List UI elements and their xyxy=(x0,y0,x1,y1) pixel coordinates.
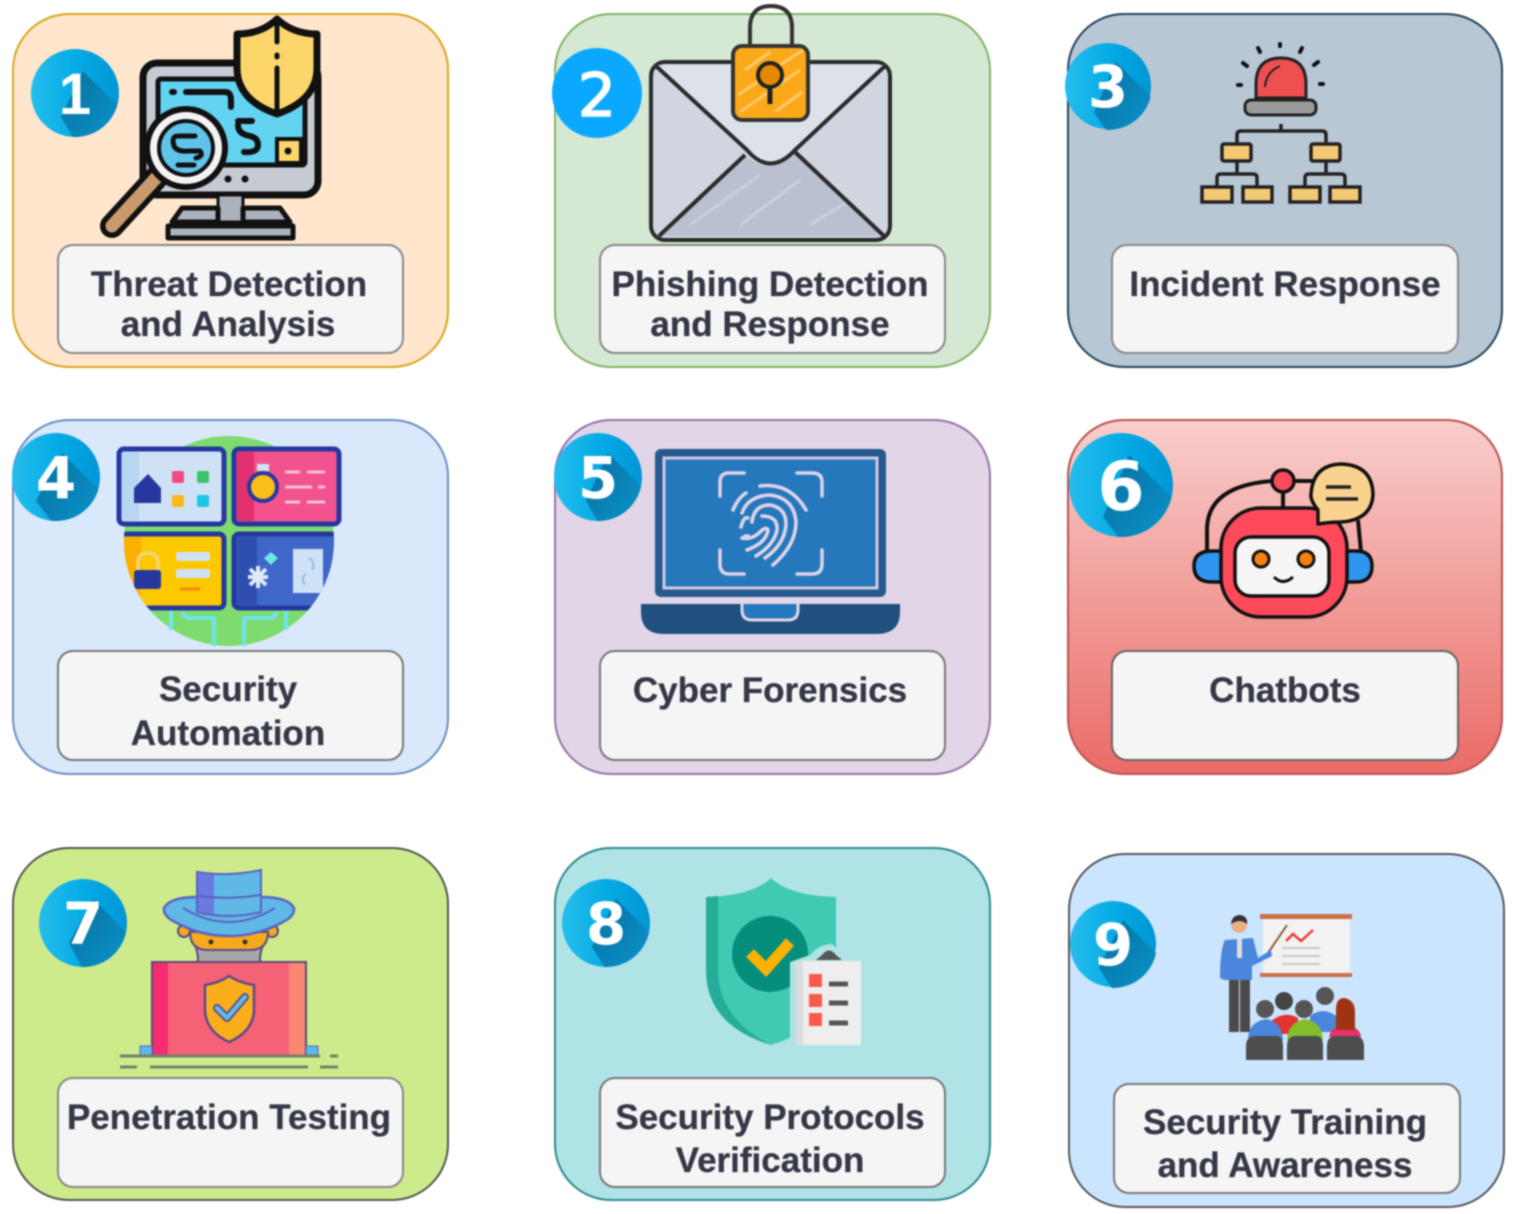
badge: number 5: 5 xyxy=(578,444,618,512)
label box xyxy=(58,1078,403,1187)
panel: penetration testing xyxy=(13,848,448,1200)
panel: phishing detection and response xyxy=(552,6,990,367)
panel: chatbots xyxy=(1068,420,1502,774)
icon: envelope with padlock xyxy=(651,6,890,240)
icon: shield with checklist xyxy=(706,878,861,1050)
label text: and Analysis xyxy=(121,305,335,344)
label text: Cyber Forensics xyxy=(633,671,907,710)
label text: Penetration Testing xyxy=(67,1098,391,1137)
badge: number 8: 8 xyxy=(586,890,626,958)
badge: number 4: 4 xyxy=(36,444,76,512)
badge: number 9: 9 xyxy=(1093,911,1133,979)
label box xyxy=(600,651,945,760)
card background xyxy=(1069,854,1504,1207)
label text: Security Training xyxy=(1143,1103,1427,1142)
card background xyxy=(555,848,990,1200)
icon: alarm and hierarchy xyxy=(1202,44,1360,202)
card background xyxy=(1068,420,1502,774)
badge: number 7 xyxy=(38,878,128,968)
label box xyxy=(600,1078,945,1187)
card background xyxy=(555,420,990,774)
panel: security training and awareness xyxy=(1069,854,1504,1207)
label box xyxy=(58,245,403,353)
label box xyxy=(1114,1084,1460,1193)
icon: hacker behind laptop xyxy=(120,870,338,1067)
badge: number 2 xyxy=(552,48,642,138)
label text: Security xyxy=(159,670,298,709)
card background xyxy=(1068,14,1502,367)
card background xyxy=(555,14,990,367)
panel: security automation xyxy=(12,420,448,774)
badge: number 2: 2 xyxy=(578,61,616,131)
badge: number 4 xyxy=(11,432,101,522)
badge: number 3 xyxy=(1064,42,1152,131)
icon: monitor with shield and magnifier xyxy=(112,19,318,238)
icon: presenter and audience xyxy=(1220,914,1364,1060)
badge: number 1 xyxy=(30,48,120,138)
label text: Security Protocols xyxy=(615,1098,925,1137)
label text: and Awareness xyxy=(1158,1146,1412,1185)
label text: and Response xyxy=(650,305,890,344)
label box xyxy=(1112,651,1458,760)
icon: robot with speech bubble xyxy=(1194,464,1373,617)
panel: incident response xyxy=(1065,14,1502,367)
label text: Threat Detection xyxy=(91,265,367,304)
badge: number 6 xyxy=(1068,432,1174,538)
badge: number 7: 7 xyxy=(63,890,103,958)
icon: shield dashboard xyxy=(119,436,339,646)
badge: number 8 xyxy=(561,878,651,968)
label text: Automation xyxy=(131,714,325,753)
badge: number 6: 6 xyxy=(1097,448,1145,527)
panel: threat detection and analysis xyxy=(13,14,448,367)
label box xyxy=(600,245,945,353)
label box xyxy=(58,651,403,760)
label box xyxy=(1112,245,1458,353)
label text: Phishing Detection xyxy=(612,265,928,304)
label text: Verification xyxy=(676,1141,864,1180)
label text: Incident Response xyxy=(1129,265,1441,304)
card background xyxy=(13,848,448,1200)
icon: laptop with fingerprint xyxy=(641,449,900,634)
panel: security protocols verification xyxy=(555,848,990,1200)
badge: number 3: 3 xyxy=(1088,53,1128,121)
badge: number 9 xyxy=(1069,900,1157,989)
card background xyxy=(13,14,448,367)
panel: cyber forensics xyxy=(554,420,990,774)
label text: Chatbots xyxy=(1209,671,1361,710)
badge: number 5 xyxy=(553,432,643,522)
card background xyxy=(13,420,448,774)
badge: number 1: 1 xyxy=(59,62,91,127)
